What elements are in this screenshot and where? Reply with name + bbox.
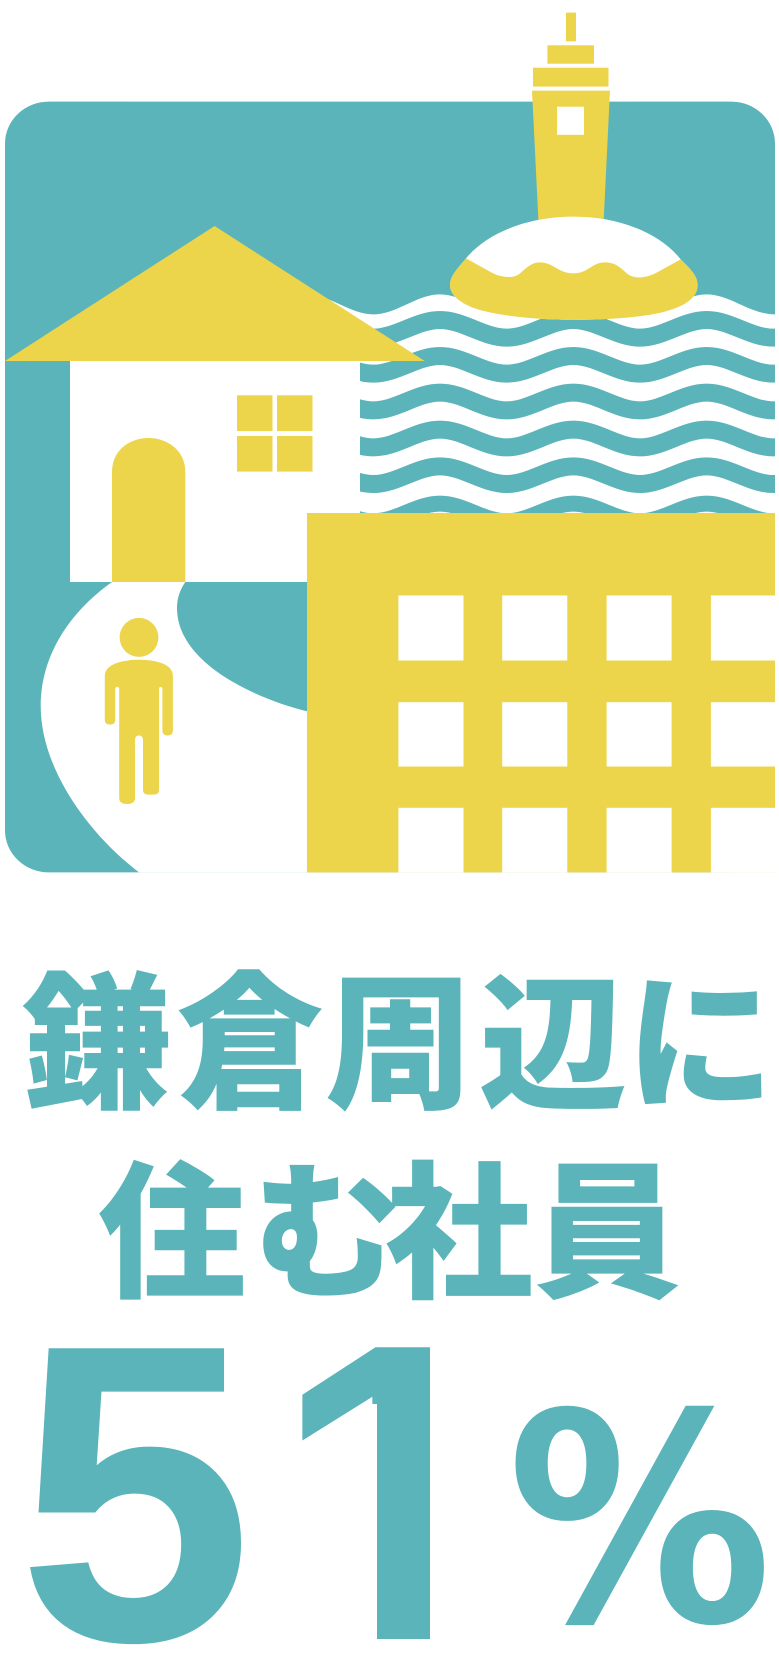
statistic: 51 percent [17,1255,772,1660]
road [41,582,308,872]
office building [307,513,775,872]
panel: teal rounded background [5,102,775,872]
lighthouse [532,13,610,222]
heading line 1: 鎌倉周辺に [22,964,774,1129]
heading line 2: 住む社員 [98,1153,681,1318]
illustration: house, sea, lighthouse and office building [5,13,779,872]
island [450,217,698,320]
sea with wave bands [307,294,779,521]
house door [112,438,185,582]
house window [237,395,312,472]
house wall [70,360,360,582]
icon: person [105,618,173,804]
house roof [5,226,425,361]
